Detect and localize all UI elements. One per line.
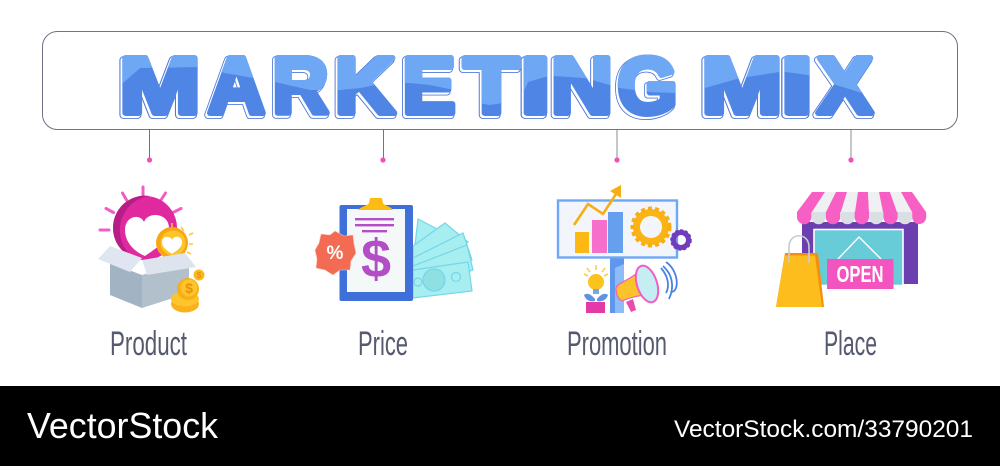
icon: product box	[98, 187, 204, 312]
title: MARKETING MIX: R	[271, 43, 327, 132]
icon: discount badge: %	[327, 243, 344, 264]
title: MARKETING MIX: K	[333, 43, 393, 132]
title: MARKETING MIX: T	[462, 43, 517, 132]
title: MARKETING MIX: T	[464, 41, 519, 130]
icon: promotion billboard	[558, 185, 691, 313]
icon: banknotes fan	[413, 219, 473, 298]
title: MARKETING MIX: M	[702, 41, 782, 130]
connector: place	[848, 130, 854, 163]
open sign: OPEN	[836, 261, 884, 287]
title: MARKETING MIX: I	[781, 41, 813, 130]
title: MARKETING MIX: N	[549, 43, 611, 132]
title: MARKETING MIX: I	[779, 43, 811, 132]
connector: promotion	[614, 130, 620, 163]
connector: product	[147, 130, 152, 163]
footer bar	[0, 386, 1000, 466]
title: MARKETING MIX: A	[206, 43, 263, 132]
title: MARKETING MIX: R	[271, 43, 327, 132]
title: MARKETING MIX: G	[616, 43, 676, 132]
title: MARKETING MIX: T	[464, 41, 519, 130]
title: MARKETING MIX: E	[402, 41, 456, 130]
connector: price	[380, 130, 386, 163]
title: MARKETING MIX: A	[208, 41, 265, 130]
title: MARKETING MIX: N	[551, 41, 613, 130]
label: Price: Price	[358, 325, 408, 363]
icon: price clipboard	[315, 198, 473, 301]
title: MARKETING MIX: R	[272, 41, 328, 130]
title: MARKETING MIX: E	[401, 43, 454, 132]
title: MARKETING MIX: M	[118, 43, 199, 132]
title: MARKETING MIX: K	[335, 41, 395, 130]
label: Promotion: Promotion	[567, 325, 667, 363]
title: MARKETING MIX: K	[333, 43, 393, 132]
title: MARKETING MIX: N	[551, 41, 613, 130]
title: MARKETING MIX: E	[402, 41, 456, 130]
label: Place: Place	[824, 325, 877, 363]
title: MARKETING MIX: E	[401, 43, 454, 132]
title: MARKETING MIX: I	[781, 41, 813, 130]
title: MARKETING MIX	[119, 54, 875, 120]
icon: shopping bag	[776, 236, 824, 307]
icon: price clipboard: $	[361, 229, 391, 289]
title: MARKETING MIX: X	[818, 41, 872, 130]
icon: megaphone	[616, 262, 677, 312]
title: MARKETING MIX: A	[208, 41, 265, 130]
title panel	[42, 32, 958, 130]
icon: place storefront	[776, 192, 926, 307]
title: MARKETING MIX: X	[818, 41, 872, 130]
title: MARKETING MIX: I	[779, 43, 811, 132]
title: MARKETING MIX: I	[520, 41, 550, 130]
title: MARKETING MIX: I	[520, 41, 550, 130]
title: MARKETING MIX: M	[120, 41, 200, 130]
title: MARKETING MIX: M	[118, 43, 199, 132]
icon: product box: $	[197, 271, 202, 280]
title: MARKETING MIX: R	[272, 41, 328, 130]
icon: product box: $	[185, 280, 193, 296]
title: MARKETING MIX: G	[616, 43, 676, 132]
title: MARKETING MIX: T	[462, 43, 517, 132]
open sign	[827, 259, 894, 289]
title: MARKETING MIX: K	[335, 41, 395, 130]
title: MARKETING MIX: X	[816, 43, 871, 132]
title: MARKETING MIX: M	[702, 41, 782, 130]
title: MARKETING MIX: I	[519, 43, 549, 132]
footer image id: VectorStock.com/33790201	[674, 416, 973, 443]
awning	[797, 192, 926, 224]
label: Product: Product	[110, 325, 187, 363]
title: MARKETING MIX: M	[700, 43, 781, 132]
title: MARKETING MIX: A	[206, 43, 263, 132]
title: MARKETING MIX: G	[618, 41, 678, 130]
footer brand: VectorStock	[27, 405, 219, 446]
icon: purple gear	[671, 230, 691, 250]
title: MARKETING MIX: M	[120, 41, 200, 130]
icon: discount badge	[315, 231, 356, 275]
title: MARKETING MIX: X	[816, 43, 871, 132]
title: MARKETING MIX: M	[700, 43, 781, 132]
title: MARKETING MIX: G	[618, 41, 678, 130]
icon: yellow gear	[632, 208, 670, 246]
icon: light bulb plant	[584, 265, 608, 313]
title: MARKETING MIX: N	[549, 43, 611, 132]
title: MARKETING MIX: I	[519, 43, 549, 132]
